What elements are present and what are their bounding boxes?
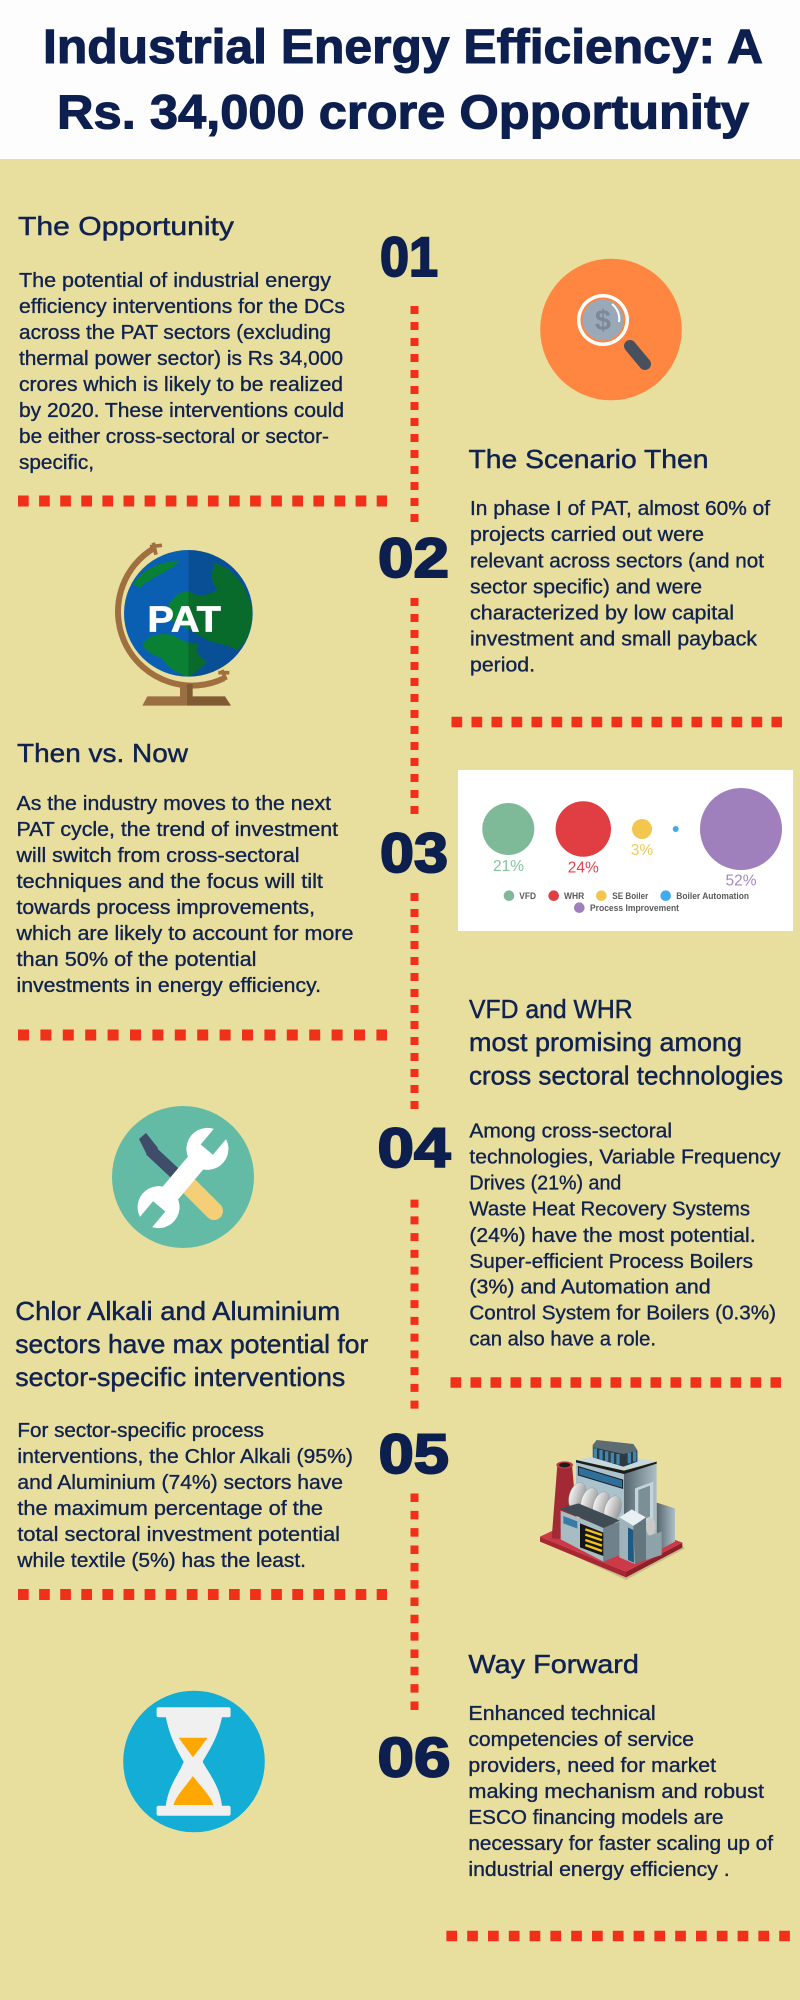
- heading: Chlor Alkali and Aluminium: sector-specific interventions: [15, 1362, 345, 1392]
- body text: Then vs. Now: [15, 793, 354, 997]
- bubble chart: investment potential by technology: [458, 770, 793, 931]
- heading: The Opportunity: The Opportunity: [18, 211, 234, 241]
- number 03: 03: [380, 821, 448, 884]
- heading: VFD and WHR: VFD and WHR: [469, 994, 633, 1024]
- chart legend: WHR: [564, 891, 585, 901]
- body text: Way Forward: industrial energy efficiency .: [468, 1859, 730, 1881]
- body text: VFD and WHR: Drives (21%) and: [469, 1172, 621, 1194]
- number 05: 05: [379, 1422, 449, 1485]
- body text: Way Forward: ESCO financing models are: [468, 1807, 724, 1829]
- body text: The Opportunity: The potential of industrial energy: [19, 270, 331, 292]
- body text: The Opportunity: efficiency interventions for the DCs: [19, 296, 345, 318]
- icon: PAT globe: PAT: [147, 600, 221, 640]
- heading: Then vs. Now: Then vs. Now: [17, 738, 188, 768]
- icon: factory building: [540, 1440, 685, 1580]
- bubble: WHR 24%: 24%: [568, 860, 599, 876]
- chart legend: Process Improvement: [590, 903, 679, 913]
- body text: VFD and WHR: Among cross-sectoral: [469, 1120, 672, 1142]
- heading: Chlor Alkali and Aluminium: [15, 1296, 369, 1392]
- panel: The Scenario Then: [468, 444, 770, 676]
- chart legend: Boiler Automation: [676, 891, 749, 901]
- chart legend: SE Boiler: [612, 891, 649, 901]
- number 02: 02: [378, 526, 449, 589]
- bubble: VFD 21%: 21%: [493, 858, 524, 875]
- number 06: 06: [378, 1726, 450, 1788]
- bubble: Boiler Automation: [673, 826, 679, 832]
- body text: Chlor Alkali and Aluminium: interventions, the Chlor Alkali (95%): [17, 1446, 353, 1468]
- body text: The Scenario Then: In phase I of PAT, almost 60% of: [470, 498, 770, 520]
- body text: The Opportunity: be either cross-sectoral or sector-: [19, 426, 329, 448]
- heading: VFD and WHR: cross sectoral technologies: [469, 1060, 783, 1090]
- body text: The Scenario Then: characterized by low capital: [470, 602, 734, 624]
- body text: Chlor Alkali and Aluminium: For sector-specific process: [17, 1420, 264, 1442]
- heading: Way Forward: Way Forward: [468, 1649, 639, 1679]
- heading: The Scenario Then: The Scenario Then: [468, 444, 708, 474]
- body text: VFD and WHR: (3%) and Automation and: [469, 1277, 711, 1299]
- icon: magnifying glass with dollar: [540, 259, 682, 400]
- body text: The Opportunity: thermal power sector) is Rs 34,000: [19, 348, 343, 370]
- body text: The Opportunity: by 2020. These interventions could: [19, 400, 344, 422]
- body text: VFD and WHR: can also have a role.: [469, 1329, 656, 1351]
- body text: Chlor Alkali and Aluminium: and Aluminium (74%) sectors have: [17, 1472, 343, 1494]
- heading: Chlor Alkali and Aluminium: Chlor Alkali and Aluminium: [15, 1296, 340, 1326]
- body text: Then vs. Now: which are likely to account for more: [15, 923, 354, 945]
- body text: Then vs. Now: will switch from cross-sectoral: [15, 845, 300, 867]
- body text: Then vs. Now: As the industry moves to the next: [16, 793, 331, 815]
- body text: VFD and WHR: (24%) have the most potential.: [469, 1225, 756, 1247]
- body text: The Scenario Then: [470, 498, 770, 676]
- body text: Then vs. Now: than 50% of the potential: [16, 949, 256, 971]
- body text: The Scenario Then: investment and small payback: [470, 628, 758, 650]
- number 01: 01: [380, 225, 438, 288]
- panel: Chlor Alkali and Aluminium: [15, 1296, 369, 1572]
- bubble: Process Improvement 52%: [700, 788, 782, 890]
- body text: The Scenario Then: period.: [470, 654, 535, 676]
- icon: PAT globe: [118, 543, 253, 706]
- bubble: VFD 21%: [482, 803, 534, 875]
- body text: Way Forward: [468, 1703, 773, 1881]
- body text: The Opportunity: across the PAT sectors (excluding: [19, 322, 331, 344]
- panel: Then vs. Now: [15, 738, 354, 997]
- title banner: Industrial Energy Efficiency: A: [43, 21, 763, 74]
- body text: Way Forward: providers, need for market: [468, 1755, 716, 1777]
- body text: Then vs. Now: techniques and the focus will tilt: [16, 871, 323, 893]
- bubble: SE Boiler 3%: 3%: [631, 842, 653, 859]
- chart legend: [504, 890, 749, 913]
- title banner: [0, 0, 800, 159]
- body text: The Opportunity: [19, 270, 345, 474]
- body text: Chlor Alkali and Aluminium: total sectoral investment potential: [17, 1524, 340, 1546]
- body text: The Scenario Then: sector specific) and were: [470, 576, 702, 598]
- body text: The Opportunity: specific,: [19, 452, 94, 474]
- body text: VFD and WHR: [469, 1120, 781, 1351]
- body text: Chlor Alkali and Aluminium: while textile (5%) has the least.: [16, 1550, 306, 1572]
- icon: magnifying glass with dollar: $: [595, 305, 611, 337]
- body text: The Opportunity: crores which is likely to be realized: [19, 374, 343, 396]
- body text: Way Forward: making mechanism and robust: [468, 1781, 764, 1803]
- icon: hourglass: [123, 1691, 265, 1832]
- panel: Way Forward: [468, 1649, 773, 1881]
- panel: VFD and WHR: [469, 994, 783, 1351]
- body text: VFD and WHR: Control System for Boilers (0.3%): [469, 1303, 776, 1325]
- number 04: 04: [378, 1116, 450, 1179]
- body text: VFD and WHR: technologies, Variable Frequency: [469, 1146, 781, 1168]
- body text: Then vs. Now: PAT cycle, the trend of investment: [16, 819, 338, 841]
- bubble: WHR 24%: [556, 801, 611, 876]
- body text: Then vs. Now: investments in energy efficiency.: [16, 975, 321, 997]
- body text: The Scenario Then: projects carried out were: [470, 524, 704, 546]
- body text: VFD and WHR: Super-efficient Process Boilers: [469, 1251, 753, 1273]
- heading: VFD and WHR: [469, 994, 783, 1090]
- heading: VFD and WHR: most promising among: [469, 1027, 742, 1057]
- body text: Way Forward: Enhanced technical: [468, 1703, 656, 1725]
- title banner: Rs. 34,000 crore Opportunity: [57, 86, 749, 140]
- bubble: Process Improvement 52%: 52%: [725, 872, 757, 890]
- body text: Chlor Alkali and Aluminium: [16, 1420, 353, 1572]
- body text: Then vs. Now: towards process improvements,: [16, 897, 315, 919]
- body text: The Scenario Then: relevant across sectors (and not: [470, 550, 764, 572]
- icon: wrench and screwdriver: [112, 1106, 254, 1248]
- panel: The Opportunity: [18, 211, 345, 474]
- chart legend: VFD: [519, 891, 536, 901]
- body text: VFD and WHR: Waste Heat Recovery Systems: [469, 1199, 750, 1221]
- body text: Way Forward: competencies of service: [468, 1729, 694, 1751]
- bubble: SE Boiler 3%: [631, 819, 653, 859]
- body text: Way Forward: necessary for faster scaling up of: [468, 1833, 773, 1855]
- body text: Chlor Alkali and Aluminium: the maximum percentage of the: [17, 1498, 323, 1520]
- heading: Chlor Alkali and Aluminium: sectors have max potential for: [15, 1329, 369, 1359]
